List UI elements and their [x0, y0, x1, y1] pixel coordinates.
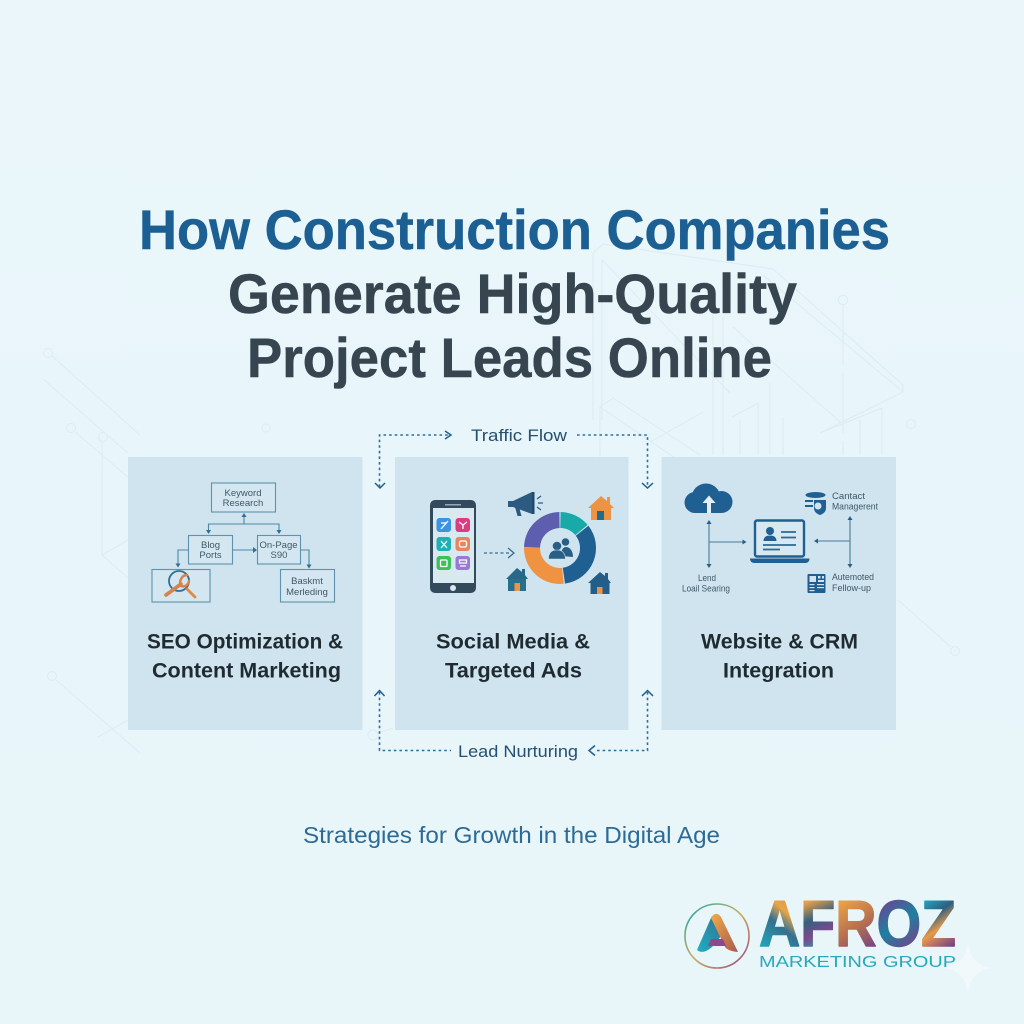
seo flow diagram: Baskmt — [291, 576, 323, 587]
panel heading: SEO Optimization & — [147, 630, 343, 654]
seo flow diagram: Blog — [201, 540, 220, 551]
icon: magnifier and wrench — [166, 571, 195, 597]
seo flow diagram: Merleding — [286, 587, 328, 598]
icon: contact database — [805, 492, 826, 515]
subtitle: Strategies for Growth in the Digital Age — [303, 822, 720, 848]
seo flow diagram — [152, 483, 334, 602]
panel: website and CRM integration — [662, 457, 896, 730]
seo flow diagram: Keyword — [225, 488, 261, 499]
panel: SEO optimization and content marketing — [128, 457, 362, 730]
title line 1: How Construction Companies — [139, 198, 890, 261]
sparkle — [944, 944, 992, 992]
lead nurturing connector — [374, 690, 653, 756]
icon: cloud upload — [684, 484, 732, 513]
logo tagline: MARKETING GROUP — [759, 954, 956, 971]
crm labels: Autemoted — [832, 572, 874, 583]
crm labels: Managerent — [832, 502, 878, 512]
seo flow diagram: On-Page — [259, 540, 298, 551]
dashed arrow — [484, 548, 514, 558]
crm labels: Fellow-up — [832, 583, 871, 594]
traffic flow connector — [375, 431, 653, 488]
label: lead nurturing: Lead Nurturing — [458, 742, 578, 761]
donut chart — [524, 512, 596, 584]
icon: follow-up form — [808, 574, 826, 593]
crm labels: Lend — [698, 573, 716, 584]
icon: laptop with profile — [750, 520, 810, 563]
seo flow diagram: S90 — [271, 550, 287, 561]
crm connector lines — [709, 519, 850, 565]
title line 3: Project Leads Online — [247, 326, 772, 389]
crm labels: Loail Searing — [682, 584, 730, 594]
panel heading — [701, 630, 858, 682]
crm labels: Cantact — [832, 491, 865, 502]
panel heading: Integration — [723, 660, 834, 682]
panel heading: Content Marketing — [152, 660, 341, 682]
seo flow diagram: Ports — [199, 550, 222, 561]
icon: teal house — [506, 568, 528, 591]
logo emblem — [685, 904, 749, 968]
logo: Afroz Marketing Group — [685, 887, 956, 971]
seo flow diagram: Research — [223, 498, 263, 509]
icon: smartphone — [430, 500, 476, 593]
icon: people — [548, 538, 573, 559]
label: traffic flow: Traffic Flow — [471, 426, 568, 445]
panel heading: Targeted Ads — [445, 660, 582, 682]
panel heading — [436, 630, 590, 682]
title — [139, 198, 890, 389]
crm labels — [682, 491, 878, 594]
icon: orange house — [588, 496, 614, 520]
logo wordmark: AFROZ — [759, 887, 956, 960]
title line 2: Generate High-Quality — [228, 262, 797, 325]
panel heading: Social Media & — [436, 630, 590, 654]
panel: social media and targeted ads — [395, 457, 628, 730]
panel heading — [147, 630, 343, 682]
icon: megaphone — [508, 492, 543, 516]
panel heading: Website & CRM — [701, 630, 858, 654]
icon: blue house — [588, 572, 611, 594]
background construction line art — [43, 244, 960, 753]
